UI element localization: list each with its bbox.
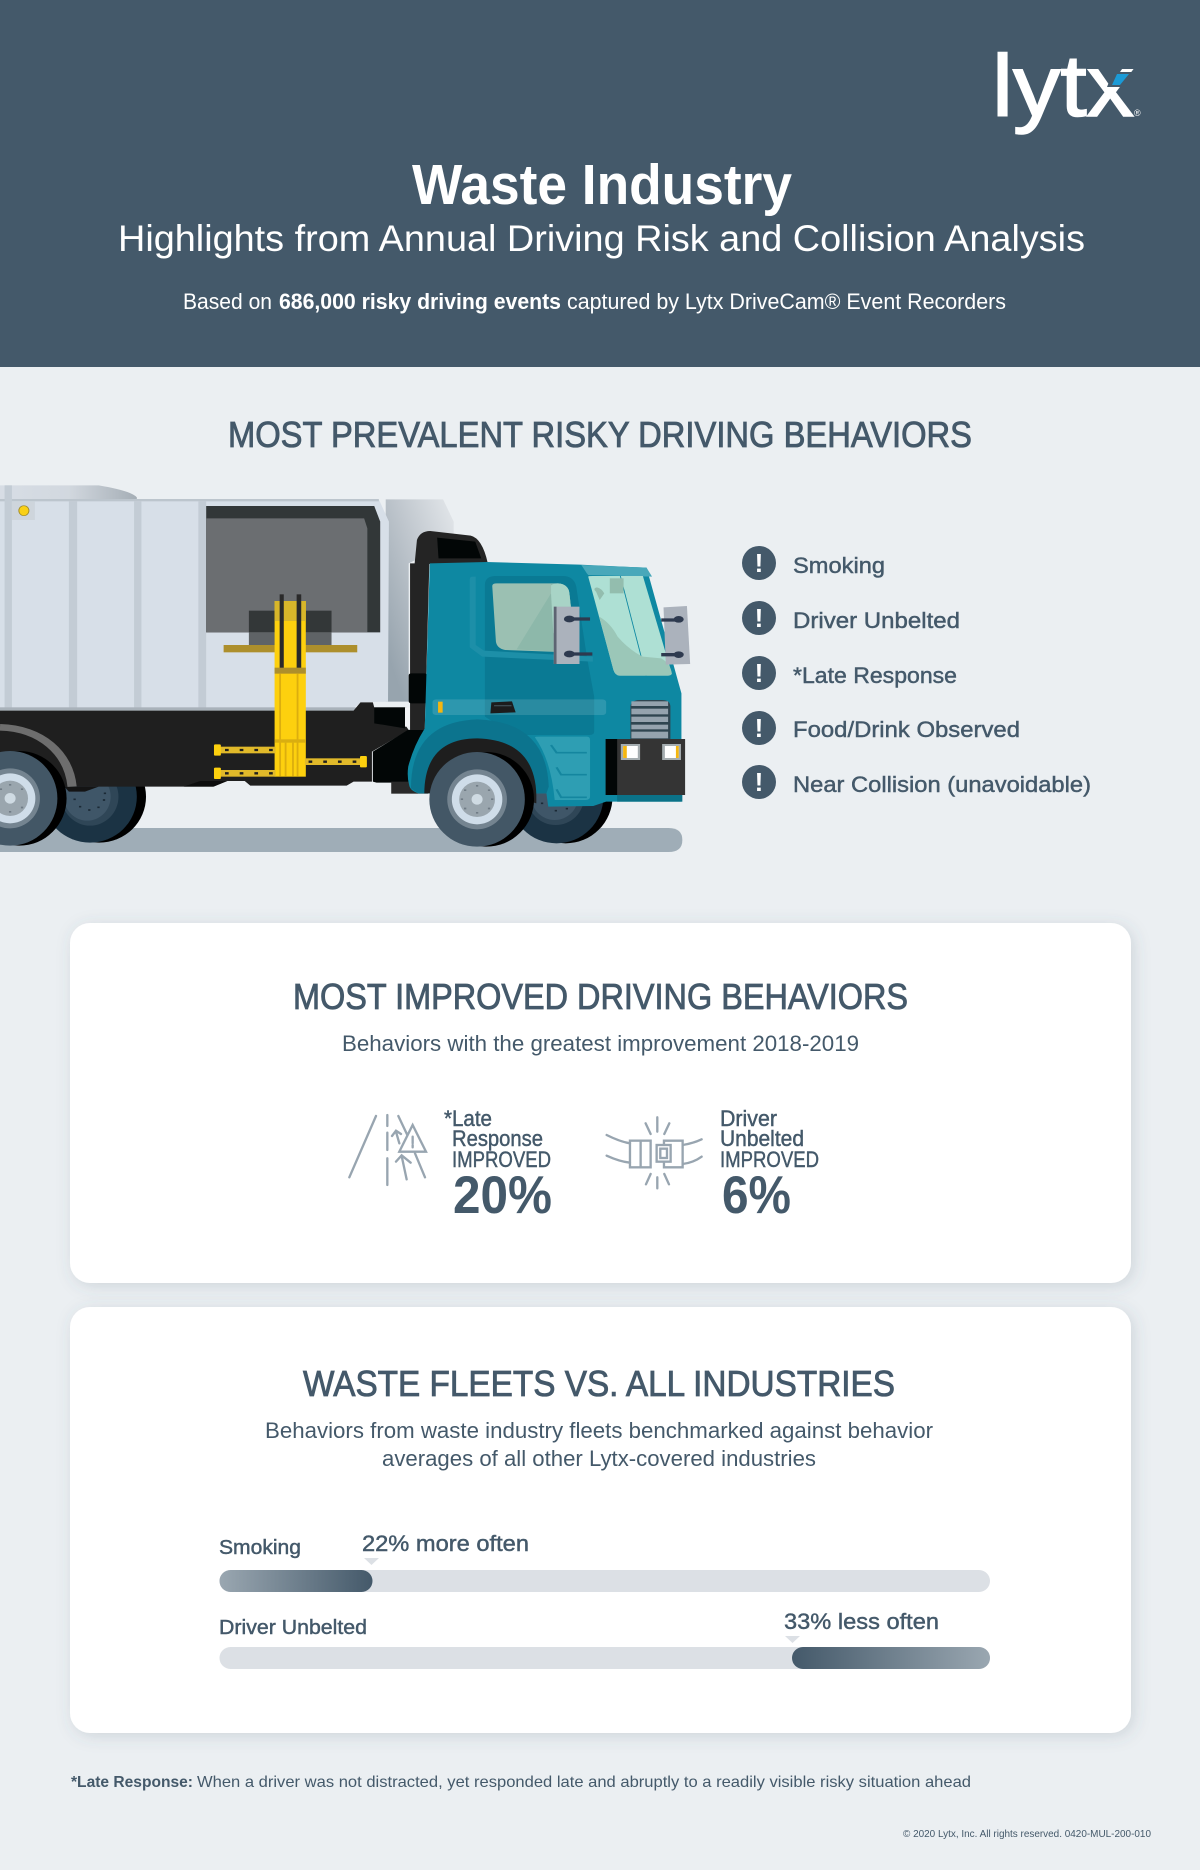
windshield bbox=[588, 576, 646, 676]
footnote: When a driver was not distracted, yet responded late and abruptly to a readily visible risky situation ahead bbox=[197, 1774, 971, 1791]
rear wheel bbox=[0, 751, 67, 846]
body panel bbox=[0, 499, 389, 708]
stat: driver unbelted bbox=[720, 1106, 819, 1225]
yellow lift arm bbox=[214, 594, 367, 779]
illustration: garbage truck bbox=[0, 485, 690, 852]
logo: lytx: ® bbox=[1134, 108, 1141, 118]
item: smoking: ! bbox=[755, 548, 763, 578]
icon: seat belt bbox=[607, 1117, 702, 1188]
bar: smoking: 22% more often bbox=[362, 1531, 529, 1556]
event count line: captured by Lytx DriveCam® Event Recorders bbox=[567, 289, 1006, 314]
stat: driver unbelted: IMPROVED bbox=[720, 1147, 819, 1172]
door bbox=[485, 576, 594, 735]
item: food/drink bbox=[742, 711, 1020, 745]
ground shadow bbox=[0, 828, 682, 852]
bar: driver unbelted: 33% less often bbox=[784, 1609, 939, 1634]
item: food/drink: Food/Drink Observed bbox=[793, 717, 1020, 742]
side band bbox=[433, 699, 606, 715]
header banner bbox=[0, 0, 1200, 367]
item: late response: ! bbox=[755, 658, 763, 688]
cab rear wall bbox=[410, 531, 488, 730]
front dual wheel bbox=[510, 750, 613, 843]
heading: MOST IMPROVED DRIVING BEHAVIORS bbox=[293, 976, 908, 1017]
chassis bbox=[0, 702, 409, 787]
bar: smoking: Smoking bbox=[219, 1537, 301, 1559]
item: driver unbelted: Driver Unbelted bbox=[793, 608, 960, 633]
heading: WASTE FLEETS VS. ALL INDUSTRIES bbox=[303, 1363, 895, 1404]
bar: smoking bbox=[219, 1531, 990, 1592]
stat: driver unbelted: 6% bbox=[722, 1166, 791, 1225]
item: late response bbox=[742, 656, 957, 690]
copyright: © 2020 Lytx, Inc. All rights reserved. 0420-MUL-200-010 bbox=[903, 1829, 1151, 1840]
footnote: *Late Response: bbox=[71, 1774, 193, 1791]
bar: driver unbelted bbox=[219, 1609, 990, 1669]
item: near collision bbox=[742, 765, 1091, 799]
front fender panel bbox=[535, 737, 590, 800]
subheading: Behaviors with the greatest improvement 2018-2019 bbox=[342, 1031, 859, 1056]
list: prevalent behaviors bbox=[742, 546, 1091, 799]
item: smoking: Smoking bbox=[793, 553, 885, 578]
body top bump bbox=[0, 485, 137, 499]
cab body bbox=[408, 562, 681, 807]
stat: driver unbelted: Driver bbox=[720, 1106, 777, 1131]
bar: driver unbelted: Driver Unbelted bbox=[219, 1617, 367, 1639]
item: smoking bbox=[742, 546, 885, 580]
grille bbox=[630, 700, 670, 740]
title: Waste Industry bbox=[412, 153, 792, 217]
logo: lytx: lytx bbox=[992, 38, 1134, 135]
item: near collision: ! bbox=[755, 767, 763, 797]
wheel arch bbox=[411, 719, 549, 793]
heading: most prevalent behaviors: MOST PREVALENT RISKY DRIVING BEHAVIORS bbox=[228, 414, 972, 455]
stat: late response bbox=[444, 1106, 552, 1225]
item: food/drink: ! bbox=[755, 713, 763, 743]
rear dual wheel bbox=[43, 751, 146, 843]
item: near collision: Near Collision (unavoidable) bbox=[793, 772, 1091, 797]
item: late response: *Late Response bbox=[793, 663, 957, 688]
side window bbox=[492, 583, 576, 653]
description: Behaviors from waste industry fleets benchmarked against behavior bbox=[265, 1418, 933, 1443]
description: averages of all other Lytx-covered industries bbox=[382, 1446, 816, 1471]
panel: most improved bbox=[70, 923, 1131, 1283]
side mirrors bbox=[554, 606, 690, 665]
front bumper bbox=[606, 739, 685, 802]
icon: road hazard bbox=[349, 1115, 426, 1185]
panel: waste fleets vs all industries bbox=[70, 1307, 1131, 1733]
subtitle: Highlights from Annual Driving Risk and Collision Analysis bbox=[118, 218, 1085, 259]
item: driver unbelted: ! bbox=[755, 603, 763, 633]
stat: late response: 20% bbox=[453, 1166, 552, 1225]
event count line: Based on bbox=[183, 289, 272, 314]
stat: late response: IMPROVED bbox=[452, 1147, 551, 1172]
marker light bbox=[12, 502, 35, 520]
event count line: 686,000 risky driving events bbox=[279, 289, 561, 314]
hopper rear gradient bbox=[379, 499, 454, 702]
hopper opening bbox=[206, 506, 380, 632]
stat: late response: *Late bbox=[444, 1106, 492, 1131]
stat: driver unbelted: Unbelted bbox=[720, 1126, 804, 1151]
stat: late response: Response bbox=[452, 1126, 543, 1151]
front wheel bbox=[429, 752, 534, 847]
event count line bbox=[183, 289, 1006, 314]
rear fender arc bbox=[0, 727, 72, 787]
description bbox=[265, 1418, 933, 1471]
item: driver unbelted bbox=[742, 601, 960, 635]
